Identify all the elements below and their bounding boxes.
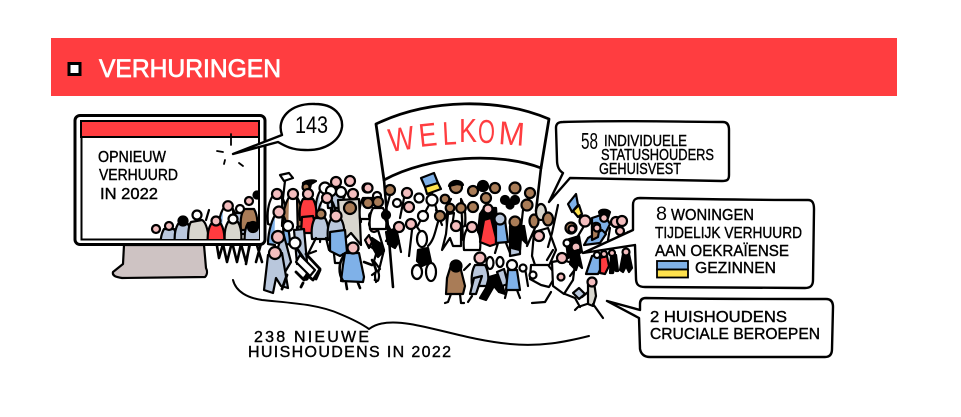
bracket: nieuwe huishoudens (233, 280, 589, 345)
flag held by figure (280, 173, 293, 181)
banner text WELKOM: M (498, 114, 526, 153)
callout text: 58 (581, 128, 598, 154)
callout text: STATUSHOUDERS (601, 147, 714, 164)
runner with folder (588, 282, 596, 306)
callout text (650, 309, 820, 343)
runners (530, 265, 556, 287)
crowd inside monitor (150, 190, 259, 239)
banner text WELKOM: L (441, 114, 457, 152)
banner text WELKOM: O (478, 113, 495, 150)
callout text: INDIVIDUELE (604, 133, 687, 150)
callout text: AAN OEKRAÏENSE (655, 242, 789, 260)
wheelchair figure centre (417, 231, 427, 247)
crowd under the banner (364, 173, 632, 318)
callout: 143 (217, 104, 342, 166)
monitor screen (82, 122, 259, 240)
callout text: GEZINNEN (695, 260, 776, 277)
centre group (447, 199, 465, 240)
crowd left of the banner (264, 173, 384, 293)
heading: VERHURINGEN (99, 55, 281, 83)
banner text WELKOM: W (386, 119, 417, 159)
crowd: legs behind monitor (216, 240, 262, 264)
callout text: WONINGEN (671, 207, 754, 224)
monitor text (98, 149, 178, 203)
callout text: 2 HUISHOUDENS (650, 309, 787, 326)
wheelchair figure (341, 253, 364, 282)
banner (376, 104, 549, 180)
callout text: CRUCIALE BEROEPEN (650, 326, 820, 343)
banner text WELKOM: E (417, 115, 439, 154)
callout: individuele statushouders (549, 121, 729, 202)
right side flag (568, 194, 584, 236)
text: 238 nieuwe huishoudens: 238 NIEUWE (254, 329, 369, 346)
brown dress figure (446, 262, 465, 294)
icon: Ukrainian flag (657, 261, 688, 278)
monitor text: VERHUURD (99, 167, 178, 184)
parents with stroller (294, 229, 307, 264)
icon: header bullet (69, 64, 80, 74)
number 143: 143 (295, 112, 328, 139)
group under callout tail (586, 254, 601, 274)
callout: cruciale beroepen (607, 298, 833, 357)
callout text: 8 (656, 204, 667, 225)
icon: monitor stand (113, 245, 207, 278)
icon: sparkle (217, 134, 243, 166)
right group (566, 236, 582, 258)
banner text WELKOM: K (459, 112, 477, 149)
text: 238 nieuwe huishoudens: HUISHOUDENS IN 2022 (248, 344, 451, 361)
text: 238 nieuwe huishoudens (248, 329, 451, 361)
header banner (51, 38, 897, 96)
banner poles (376, 104, 549, 287)
callout text (581, 128, 714, 178)
callout text (655, 204, 802, 277)
icon: monitor (75, 116, 265, 250)
callout: oekraiense gezinnen (583, 198, 814, 288)
monitor red bar (81, 121, 259, 137)
banner text WELKOM (386, 112, 526, 159)
callout text: TIJDELIJK VERHUURD (655, 225, 802, 242)
figures at right under banner (532, 228, 556, 268)
centre bottom figures (472, 265, 488, 286)
flag (421, 173, 441, 218)
callout text: GEHUISVEST (599, 161, 681, 178)
monitor text: OPNIEUW (98, 149, 167, 166)
monitor text: IN 2022 (100, 186, 158, 203)
